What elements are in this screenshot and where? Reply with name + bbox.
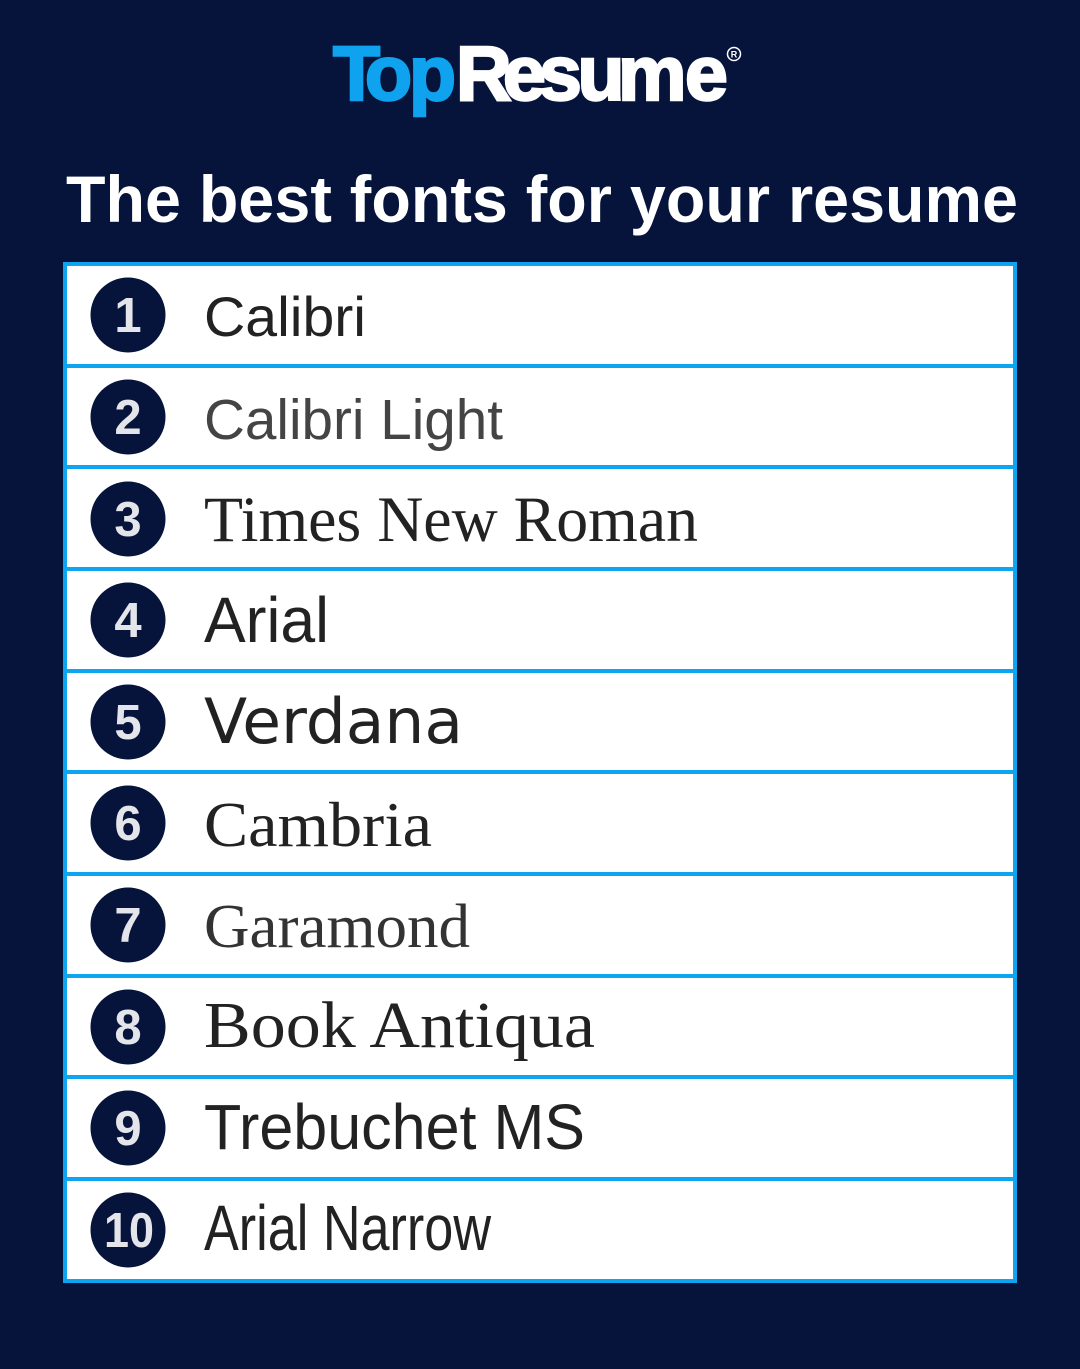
row 2: Calibri Light: 2 [114, 391, 142, 445]
row 5: Verdana: 5 [114, 696, 142, 750]
row 6: Cambria: Cambria [204, 790, 432, 860]
row 1: Calibri: 1 [114, 289, 142, 343]
row 10: Arial Narrow [90, 1192, 492, 1268]
row 9: Trebuchet MS: Trebuchet MS [204, 1091, 585, 1163]
logo: TopResume: Top [333, 31, 456, 117]
row 2: Calibri Light: Calibri Light [204, 388, 503, 452]
row 3: Times New Roman: Times New Roman [204, 484, 698, 556]
row 8: Book Antiqua: 8 [114, 1001, 142, 1055]
row 7: Garamond: Garamond [204, 893, 470, 961]
row 4: Arial: 4 [114, 594, 142, 648]
row 1: Calibri [90, 278, 366, 352]
row 5: Verdana [90, 684, 463, 760]
row 10: Arial Narrow: 10 [104, 1204, 154, 1258]
panel: ranked font list [65, 264, 1015, 1281]
row 6: Cambria [90, 786, 432, 860]
row 2: Calibri Light [90, 380, 503, 454]
row 7: Garamond: 7 [114, 899, 142, 953]
row 9: Trebuchet MS: 9 [114, 1102, 142, 1156]
row 6: Cambria: 6 [114, 797, 142, 851]
row 8: Book Antiqua: Book Antiqua [204, 989, 595, 1062]
logo: TopResume [333, 31, 740, 117]
row 5: Verdana: Verdana [204, 685, 463, 758]
row 10: Arial Narrow: Arial Narrow [204, 1192, 492, 1264]
logo: TopResume: Resume [456, 31, 728, 117]
row 3: Times New Roman: 3 [114, 493, 142, 547]
title: The best fonts for your resume [66, 162, 1018, 236]
row 7: Garamond [90, 888, 470, 962]
row 4: Arial: Arial [204, 584, 329, 656]
row 1: Calibri: Calibri [204, 285, 366, 348]
logo: TopResume: R [731, 50, 738, 60]
row 4: Arial [90, 582, 329, 658]
